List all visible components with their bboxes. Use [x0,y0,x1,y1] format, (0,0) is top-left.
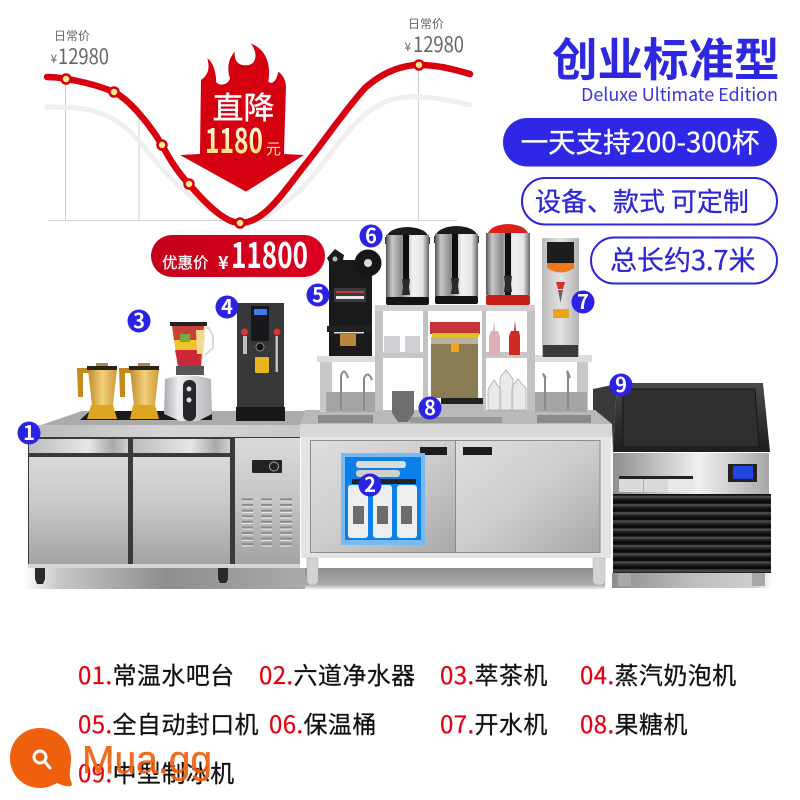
control display [251,306,269,351]
badge 6 [360,220,382,249]
right regular price label [404,15,464,59]
floor shadows [24,568,772,590]
customizable pill [522,178,777,224]
icon: search bubble [10,728,72,788]
badge 3 [128,305,150,334]
item 03: 03.萃茶机 [440,656,548,691]
right regular price label: ¥ [404,38,412,55]
item 08: 08.果糖机 [580,705,688,740]
compressor panel [235,438,300,564]
right regular price label: 12980 [413,29,464,59]
badge 1 [18,417,40,446]
badge 2 [358,469,382,498]
item 07: 07.开水机 [440,705,548,740]
counter surface [38,411,322,426]
badge 9: 9 [615,369,627,398]
promotional price pill: ¥ [218,249,229,275]
right regular price label: 日常价 [408,15,444,32]
refrigerator doors [29,439,230,564]
badge 2: 2 [364,469,376,498]
tea pitcher [392,391,414,422]
equipment: upper stainless shelves [317,305,592,422]
item 05: 05.全自动封口机 [78,705,259,740]
subtitle: Deluxe Ultimate Edition [581,81,778,107]
badge 7: 7 [577,286,589,315]
counter feet [35,568,228,584]
ice machine display [728,464,757,482]
sauce bottles [489,320,500,355]
equipment legend list [78,656,737,789]
badge 3: 3 [133,305,145,334]
blender base [164,376,212,421]
flame down arrow with price drop [180,43,304,192]
badge 9 [610,369,632,398]
golden jug two [119,363,159,419]
total length pill: 总长约3.7米 [610,239,755,278]
golden jug one [77,363,117,419]
customizable pill: 设备、款式 可定制 [535,182,749,219]
left regular price label: ¥ [50,50,58,67]
equipment: cup sealing machine [327,249,382,356]
equipment: steam milk frother [236,303,285,421]
warning labels [619,476,693,492]
flame down arrow with price drop: 1180 [205,114,263,163]
left regular price label: 日常价 [54,27,90,44]
left regular price label [50,27,109,71]
badge 5: 5 [312,279,324,308]
equipment: water purifier panel [341,453,425,545]
red barrel [486,224,530,305]
faucets [341,371,570,410]
badge 8: 8 [424,392,436,421]
flame down arrow with price drop: 元 [266,138,281,159]
capacity pill: 一天支持200-300杯 [521,120,759,160]
total length pill [591,238,777,284]
title: 创业标准型 [552,24,780,90]
badge 4: 4 [221,291,233,320]
data point markers [62,60,424,228]
equipment: hot water boiler [542,238,579,357]
clear containers [384,336,420,353]
equipment: left water bar counter [28,411,322,584]
item 09: 09.中型制冰机 [78,754,235,789]
equipment: three insulated barrels [385,224,530,305]
badge 6: 6 [365,220,377,249]
item 06: 06.保温桶 [269,705,377,740]
flame down arrow with price drop: 直降 [212,83,274,128]
watermark logo [10,728,212,788]
watermark logo: Mua.gg [82,739,212,782]
item 04: 04.蒸汽奶泡机 [580,656,737,691]
equipment: fructose machine [430,322,483,410]
promotional price pill: 优惠价 [162,251,209,273]
item 01: 01.常温水吧台 [78,656,235,691]
promotional price pill [151,228,325,279]
equipment: tea extractor blender with jugs [77,322,213,421]
black barrel [385,227,430,305]
badge 8 [418,392,442,421]
legs [307,558,605,585]
equipment: center sink cabinet [300,410,612,585]
price drop curve chart [47,60,470,228]
blender jar with fruit [170,322,213,375]
item 02: 02.六道净水器 [259,656,416,691]
equipment: ice machine [593,383,771,586]
left regular price label: 12980 [58,41,109,71]
cocktail shakers [488,370,526,410]
badge 4 [216,291,238,320]
promotional price pill: 11800 [231,228,308,279]
number badges [18,220,632,498]
casters [618,573,765,586]
badge 5 [306,279,330,308]
counter top surface [300,410,612,424]
cabinet doors [310,440,600,552]
badge 1: 1 [23,417,35,446]
brown barrel [434,226,479,304]
badge 7 [572,286,594,315]
